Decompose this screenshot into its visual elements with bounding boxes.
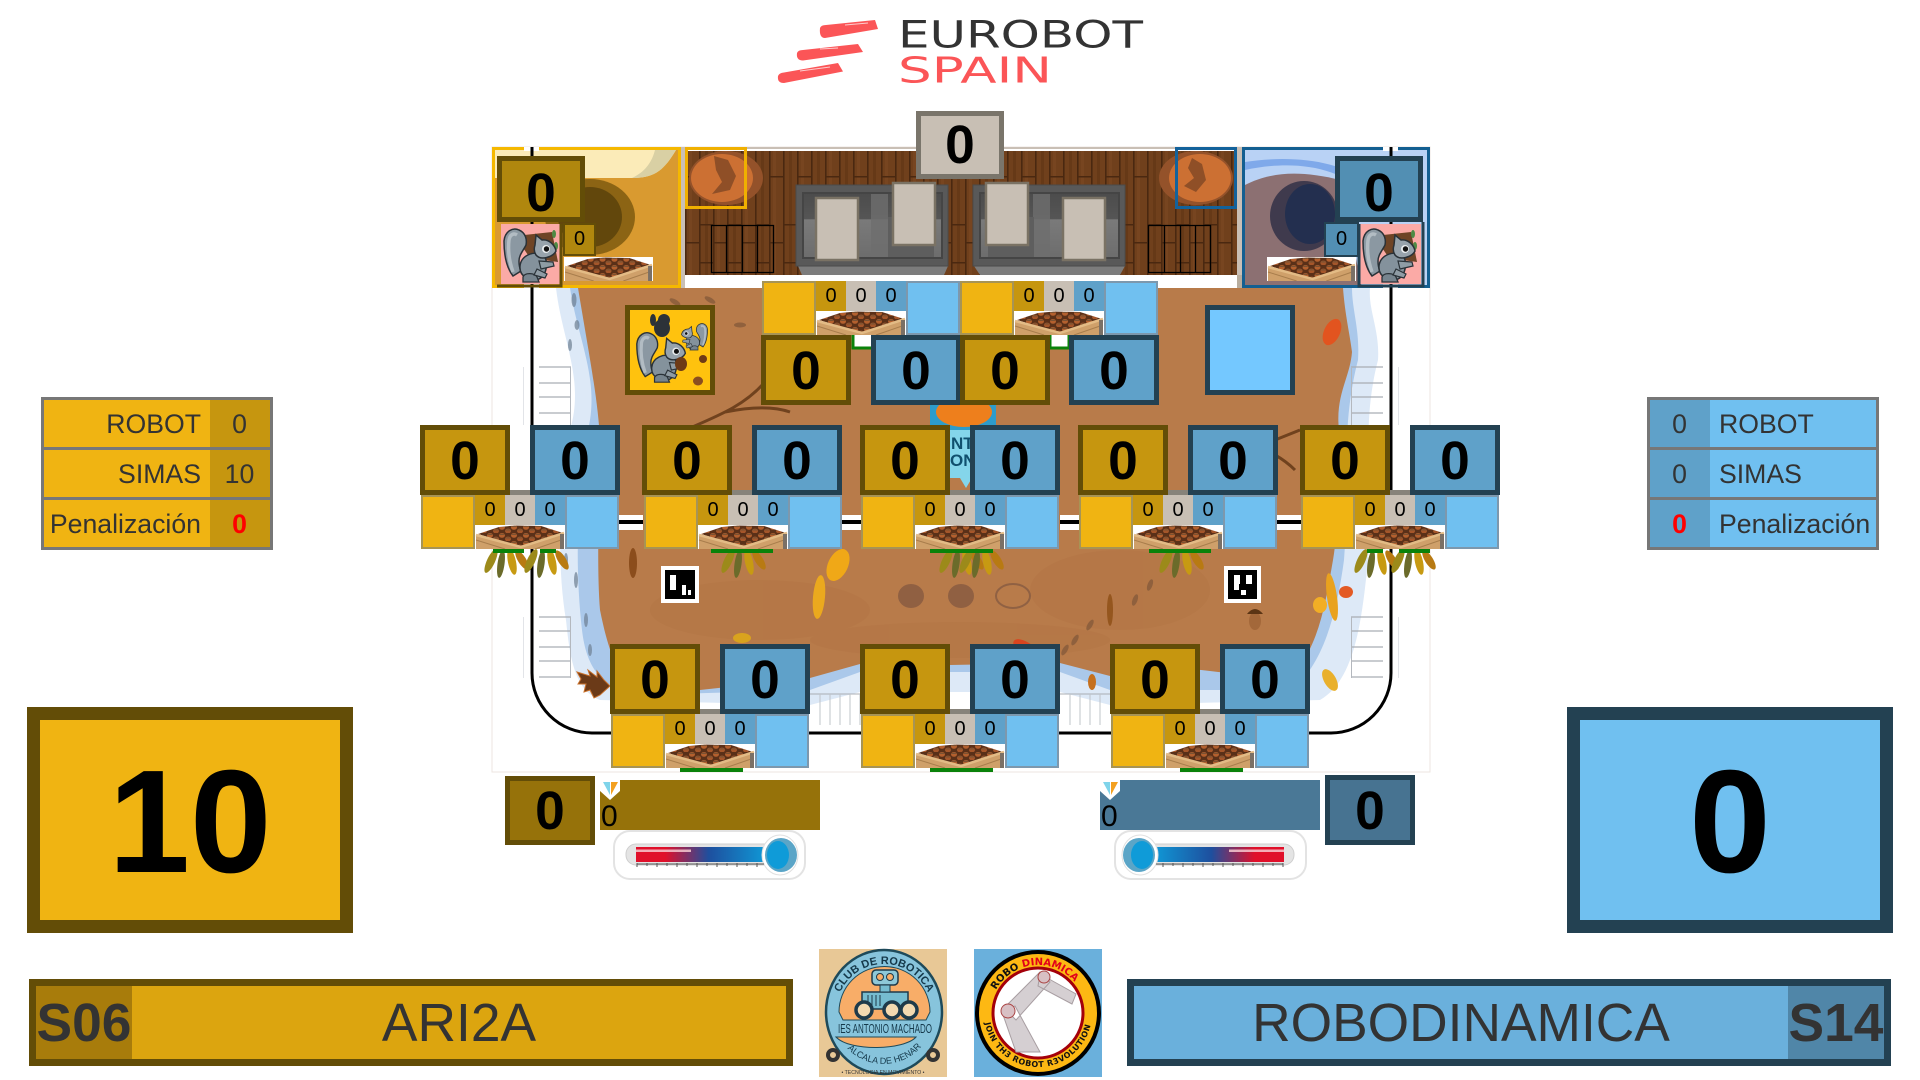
yellow score F — [610, 644, 700, 714]
lower tribune group 2 — [861, 714, 1059, 768]
field background — [492, 147, 1430, 772]
event poster behind boxes — [930, 397, 996, 488]
middle tribune group 3 — [861, 495, 1059, 549]
machine left — [796, 185, 948, 275]
blue score G: 0 — [1000, 651, 1030, 710]
middle tribune group 4: 0 — [1202, 499, 1214, 521]
blue score C — [970, 425, 1060, 495]
middle tribune group 2 — [644, 495, 842, 549]
middle tribune group 1: 0 — [484, 499, 496, 521]
lower tribune group 1: 0 — [674, 718, 686, 740]
robot row — [1650, 400, 1876, 447]
lower tribune group 2: 0 — [984, 718, 996, 740]
blue score D: 0 — [1218, 432, 1248, 491]
pale ice area — [556, 288, 1378, 705]
team logo: robodinamica — [974, 949, 1102, 1077]
blue score 1 — [871, 335, 961, 405]
side stair markings — [524, 367, 1398, 725]
event poster behind boxes: NT — [951, 434, 974, 453]
blue score H — [1220, 644, 1310, 714]
acorn — [1247, 609, 1263, 630]
lower tribune group 3: 0 — [1234, 718, 1246, 740]
yellow score B — [642, 425, 732, 495]
simas row: SIMAS — [1719, 459, 1802, 489]
blue nest — [1242, 147, 1430, 288]
blue nest crate — [1267, 257, 1356, 281]
team name ARI2A: ARI2A — [382, 994, 536, 1053]
yellow score 1: 0 — [791, 342, 821, 401]
blue total score — [1567, 707, 1893, 933]
yellow score E: 0 — [1330, 432, 1360, 491]
robot row: ROBOT — [106, 409, 201, 439]
yellow nest small count — [563, 223, 596, 256]
yellow score D: 0 — [1108, 432, 1138, 491]
team logo: club de robotica: CLUB DE ROBOTICA — [834, 956, 934, 992]
middle tribune group 2: 0 — [767, 499, 779, 521]
footprints — [564, 293, 592, 656]
middle tribune group 2: 0 — [737, 499, 749, 521]
blue target outline — [1176, 148, 1236, 208]
penalty row — [44, 500, 270, 547]
yellow nest small count: 0 — [574, 228, 585, 250]
middle tribune group 3: 0 — [924, 499, 936, 521]
yellow target outline — [686, 148, 746, 208]
icon: thermometer shield blue — [1100, 780, 1120, 800]
yellow score 2 — [960, 335, 1050, 405]
yellow thermometer score: 0 — [535, 782, 565, 841]
thermometer yellow — [614, 831, 805, 879]
yellow total score — [27, 707, 353, 933]
lower tribune group 3: 0 — [1174, 718, 1186, 740]
blue score A: 0 — [560, 432, 590, 491]
yellow score B: 0 — [672, 432, 702, 491]
top tribune group 1: 0 — [885, 285, 897, 307]
blue thermometer score: 0 — [1355, 782, 1385, 841]
yellow score C — [860, 425, 950, 495]
thermometer blue — [1115, 831, 1306, 879]
team logo: robodinamica: JOIN TH3 ROBOT R3VOLUTION — [983, 1022, 1090, 1068]
simas row: 0 — [1672, 459, 1687, 489]
lower tribune group 2: 0 — [924, 718, 936, 740]
blue score 1: 0 — [901, 342, 931, 401]
middle tribune group 4: 0 — [1142, 499, 1154, 521]
blue nest score: 0 — [1364, 164, 1394, 223]
central line bars — [619, 515, 1301, 530]
top tribune group 2: 0 — [1083, 285, 1095, 307]
yellow squirrel card — [628, 308, 712, 392]
yellow bar value: 0 — [601, 800, 618, 833]
simas row: 10 — [225, 459, 254, 489]
upper score boxes — [761, 335, 1159, 405]
yellow nest crate — [564, 257, 653, 281]
middle tribune group 5: 0 — [1364, 499, 1376, 521]
Eurobot logo — [778, 14, 1144, 92]
yellow team bar — [29, 979, 793, 1066]
emblem right — [1159, 151, 1233, 205]
middle tribune group 5 — [1301, 495, 1499, 549]
lower tribune group 3: 0 — [1204, 718, 1216, 740]
team logo: club de robotica: IES ANTONIO MACHADO — [838, 1021, 932, 1036]
lower tribune group 2: 0 — [954, 718, 966, 740]
blue thermometer score — [1325, 775, 1415, 845]
middle tribune group 2: 0 — [707, 499, 719, 521]
team logo: club de robotica — [819, 948, 947, 1077]
team logo: club de robotica: • TECNOLOGIA EN MOVIMIENTO • — [842, 1070, 925, 1076]
yellow breakdown table — [41, 397, 273, 550]
blue score F — [720, 644, 810, 714]
fallen leaves — [577, 316, 1353, 698]
yellow nest — [492, 147, 681, 288]
yellow score G: 0 — [890, 651, 920, 710]
machine right — [973, 185, 1125, 275]
penalty row: 0 — [1672, 509, 1687, 539]
penalty row: Penalización — [1719, 509, 1870, 539]
blue score E: 0 — [1440, 432, 1470, 491]
top tribune group 2 — [960, 281, 1158, 335]
fallen branch — [690, 382, 1300, 470]
yellow score 1 — [761, 335, 851, 405]
center score box: 0 — [945, 116, 975, 175]
blue score 2: 0 — [1099, 342, 1129, 401]
sponsor stamps — [898, 584, 1030, 608]
yellow score D — [1078, 425, 1168, 495]
blue nest score — [1335, 156, 1423, 222]
blue nest small count: 0 — [1336, 228, 1347, 250]
lower row score boxes — [610, 644, 1310, 714]
top tribune frames — [853, 330, 1069, 348]
yellow score 2: 0 — [990, 342, 1020, 401]
blue card — [1208, 308, 1292, 392]
simas row — [44, 450, 270, 497]
robot row: ROBOT — [1719, 409, 1814, 439]
yellow score H — [1110, 644, 1200, 714]
yellow total score: 10 — [108, 740, 272, 904]
blue nest squirrel — [1359, 222, 1423, 286]
blue score B: 0 — [782, 432, 812, 491]
icon: thermometer shield yellow — [600, 780, 620, 800]
blue bar value: 0 — [1101, 800, 1118, 833]
middle tribune group 4: 0 — [1172, 499, 1184, 521]
aruco marker right — [1224, 566, 1261, 603]
middle tribune group 4 — [1079, 495, 1277, 549]
black arena boundary — [532, 147, 1391, 733]
simas row — [1650, 450, 1876, 497]
team code S14: S14 — [1789, 994, 1883, 1053]
middle tribune group 3: 0 — [954, 499, 966, 521]
yellow nest score — [497, 156, 585, 222]
blue score 2 — [1069, 335, 1159, 405]
middle tribune group 1: 0 — [514, 499, 526, 521]
robot row: 0 — [1672, 409, 1687, 439]
top tribune group 1: 0 — [825, 285, 837, 307]
blue breakdown table — [1647, 397, 1879, 550]
Eurobot logo: SPAIN — [898, 50, 1052, 92]
emblem left — [689, 151, 763, 205]
blue nest small count — [1324, 222, 1359, 257]
blue score E — [1410, 425, 1500, 495]
yellow score E — [1300, 425, 1390, 495]
dark squirrel — [650, 314, 670, 337]
aruco marker left — [661, 566, 699, 603]
yellow score A — [420, 425, 510, 495]
left crate grid — [712, 226, 774, 272]
event poster behind boxes: ON — [950, 451, 976, 470]
yellow score A: 0 — [450, 432, 480, 491]
top tribune group 2: 0 — [1023, 285, 1035, 307]
center score box — [916, 111, 1004, 179]
lower tribune group 3 — [1111, 714, 1309, 768]
lower tribune group 1: 0 — [734, 718, 746, 740]
simas row: SIMAS — [118, 459, 201, 489]
team name ROBODINAMICA: ROBODINAMICA — [1252, 994, 1670, 1053]
blue score G — [970, 644, 1060, 714]
blue score A — [530, 425, 620, 495]
blue score D — [1188, 425, 1278, 495]
middle tribune group 5: 0 — [1394, 499, 1406, 521]
wood back wall — [681, 147, 1242, 288]
gray joints between score boxes — [510, 490, 1410, 714]
blue score B — [752, 425, 842, 495]
middle tribune group 1: 0 — [544, 499, 556, 521]
green tribune markers — [493, 549, 1430, 772]
middle tribune group 5: 0 — [1424, 499, 1436, 521]
yellow score H: 0 — [1140, 651, 1170, 710]
blue total score: 0 — [1689, 740, 1771, 904]
blue score C: 0 — [1000, 432, 1030, 491]
middle row score boxes — [420, 425, 1500, 495]
penalty row: Penalización — [50, 509, 201, 539]
penalty row: 0 — [232, 509, 247, 539]
blue ice band — [570, 288, 1358, 695]
yellow thermometer score — [505, 776, 595, 845]
Eurobot logo: EUROBOT — [898, 14, 1144, 56]
brown ground — [578, 288, 1352, 692]
team code S06: S06 — [37, 994, 131, 1053]
ground mottling — [650, 550, 1210, 658]
plants under tribunes — [482, 548, 1438, 578]
yellow nest squirrel — [497, 224, 561, 286]
middle tribune group 3: 0 — [984, 499, 996, 521]
robot row: 0 — [232, 409, 247, 439]
team logo: robodinamica: ROBO DINAMICA — [990, 958, 1078, 990]
team logo: club de robotica: ALCALA DE HENARES — [847, 1044, 921, 1064]
lower tribune group 1 — [611, 714, 809, 768]
robot row — [44, 400, 270, 447]
lower tribune group 1: 0 — [704, 718, 716, 740]
progress bar yellow — [600, 780, 820, 830]
yellow score G — [860, 644, 950, 714]
right crate grid — [1148, 226, 1210, 272]
yellow score C: 0 — [890, 432, 920, 491]
blue score H: 0 — [1250, 651, 1280, 710]
middle tribune group 1 — [421, 495, 619, 549]
yellow nest score: 0 — [526, 164, 556, 223]
blue score F: 0 — [750, 651, 780, 710]
top tribune group 1 — [762, 281, 960, 335]
top tribune group 1: 0 — [855, 285, 867, 307]
storage panels — [816, 183, 1105, 260]
blue team bar — [1127, 979, 1891, 1066]
progress bar blue — [1100, 780, 1320, 830]
yellow score F: 0 — [640, 651, 670, 710]
top tribune group 2: 0 — [1053, 285, 1065, 307]
penalty row — [1650, 500, 1876, 547]
